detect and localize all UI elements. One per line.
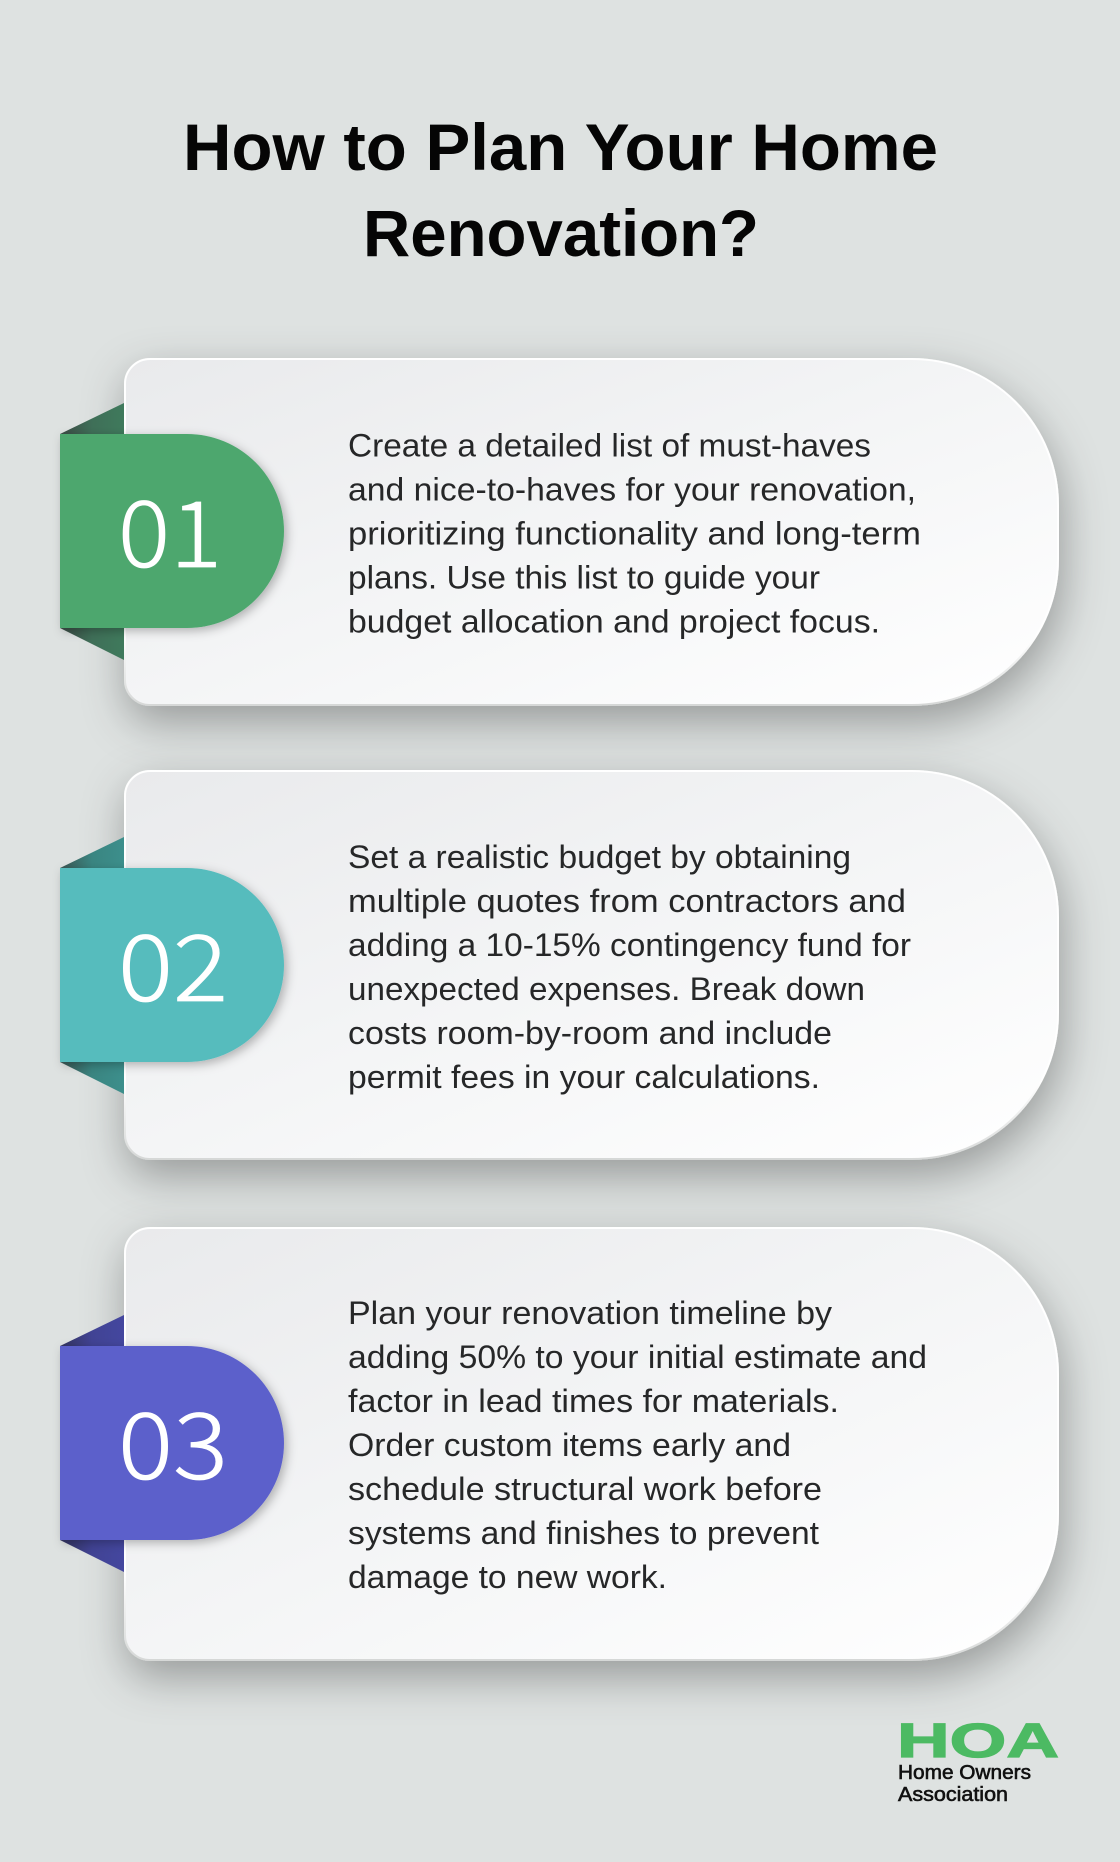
title [183, 110, 938, 270]
step 2 text [348, 839, 911, 1095]
step 2 text: adding a 10-15% contingency fund for [348, 927, 911, 963]
step 3 text: damage to new work. [348, 1559, 667, 1595]
step 1 text: plans. Use this list to guide your [348, 560, 820, 596]
step 3 ribbon folds [60, 1315, 124, 1572]
step 2 text: multiple quotes from contractors and [348, 883, 906, 919]
step 3 text: factor in lead times for materials. [348, 1383, 839, 1419]
step 3 card [125, 1228, 1058, 1660]
step 3 text: Plan your renovation timeline by [348, 1295, 833, 1331]
logo: HOA Home Owners Association: HOA [897, 1715, 1059, 1768]
logo: HOA Home Owners Association: Association [898, 1784, 1008, 1806]
step 3 text: systems and finishes to prevent [348, 1515, 819, 1551]
step 1 text: prioritizing functionality and long-term [348, 516, 921, 552]
step 3 text [348, 1295, 927, 1595]
panel: step 1 [60, 359, 1058, 705]
panel: step 2 [60, 771, 1058, 1159]
step 2 text: permit fees in your calculations. [348, 1059, 820, 1095]
step 2 card [125, 771, 1058, 1159]
step 2 text: costs room-by-room and include [348, 1015, 832, 1051]
step 2 text: Set a realistic budget by obtaining [348, 839, 851, 875]
panel: step 3 [60, 1228, 1058, 1660]
step 1 text: and nice-to-haves for your renovation, [348, 472, 916, 508]
step 3 number: 03 [118, 1373, 228, 1506]
step 1 text [348, 428, 921, 640]
step 1 text: budget allocation and project focus. [348, 604, 880, 640]
step 3 badge [60, 1346, 284, 1540]
step 1 text: Create a detailed list of must-haves [348, 428, 871, 464]
step 1 ribbon folds [60, 403, 124, 660]
logo: HOA Home Owners Association [897, 1715, 1059, 1806]
step 1 number: 01 [118, 461, 222, 594]
title: How to Plan Your Home [183, 110, 938, 184]
step 1 card [125, 359, 1058, 705]
step 3 text: adding 50% to your initial estimate and [348, 1339, 927, 1375]
step 2 ribbon folds [60, 837, 124, 1094]
step 2 badge [60, 868, 284, 1062]
logo: HOA Home Owners Association: Home Owners [898, 1762, 1031, 1784]
step 2 number: 02 [118, 895, 228, 1028]
title: Renovation? [363, 196, 759, 270]
step 3 text: schedule structural work before [348, 1471, 822, 1507]
step 3 text: Order custom items early and [348, 1427, 791, 1463]
step 2 text: unexpected expenses. Break down [348, 971, 865, 1007]
step 1 badge [60, 434, 284, 628]
